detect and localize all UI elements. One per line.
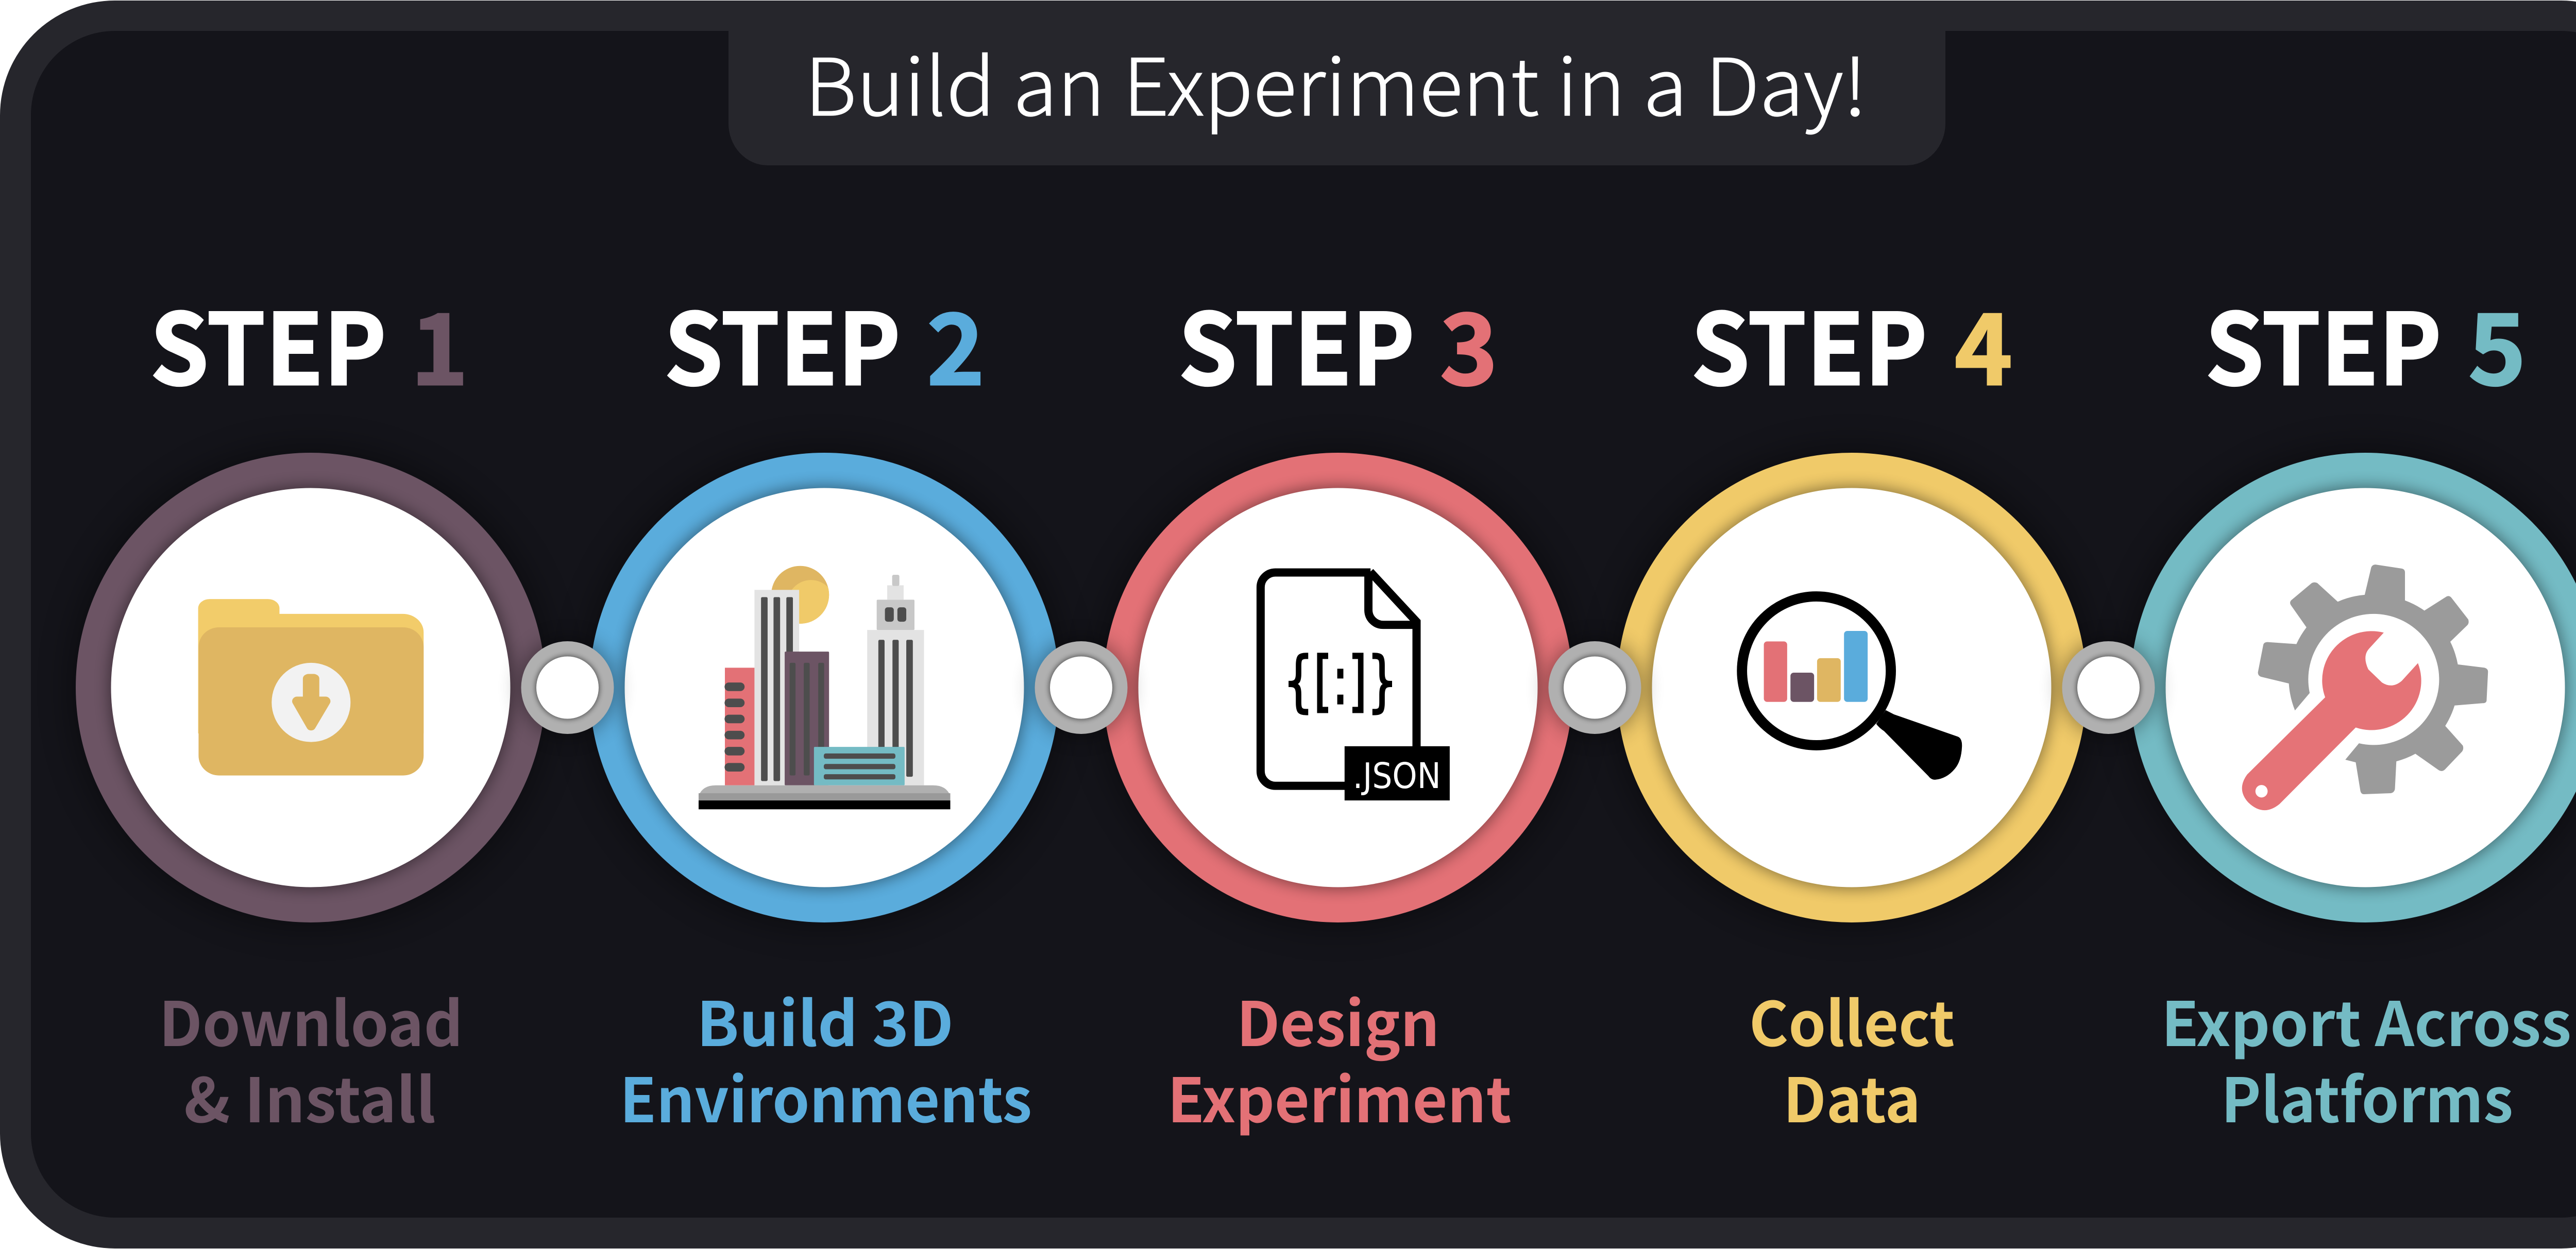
label: step 3 (1167, 976, 1512, 1140)
label: step 5: Platforms (2221, 1052, 2513, 1140)
connector 2-3 (1035, 641, 1127, 734)
label: step 5 (2161, 976, 2571, 1140)
purple building (785, 652, 829, 785)
icon: JSON file: {[:]} (1283, 643, 1398, 720)
ground base (699, 785, 951, 809)
icon: download folder (198, 599, 423, 776)
label: step 1: Download (159, 976, 463, 1064)
circle: step 4 (1609, 446, 2094, 930)
connector 4-5 (2062, 641, 2155, 734)
gear (2258, 564, 2488, 794)
step 1 heading: STEP (150, 271, 386, 414)
label: step 3: Design (1236, 976, 1439, 1064)
step 5 heading: STEP (2205, 271, 2442, 414)
circle: step 2 (582, 446, 1066, 930)
step 3 heading: STEP (1178, 271, 1415, 414)
connector 3-4 (1549, 641, 1641, 734)
label: step 3: Experiment (1167, 1052, 1512, 1140)
label: step 2: Environments (620, 1052, 1032, 1140)
step 1 heading: 1 (411, 271, 468, 414)
sun (772, 566, 829, 624)
circle: step 5 (2123, 446, 2576, 930)
icon: JSON file (1261, 572, 1450, 800)
step 3 heading: 3 (1440, 271, 1498, 414)
circle: step 1 (69, 446, 553, 930)
step 4 heading: STEP (1691, 271, 1927, 414)
title: Build an Experiment in a Day! (805, 25, 1867, 139)
icon: magnifier with bars (1742, 596, 1962, 780)
red building (724, 668, 754, 785)
label: step 1: & Install (184, 1052, 436, 1140)
label: step 4: Data (1783, 1052, 1921, 1140)
label: step 2 (620, 976, 1032, 1140)
JSON badge (1345, 746, 1450, 800)
label: step 4: Collect (1749, 976, 1955, 1064)
teal building (814, 747, 905, 785)
label: step 2: Build 3D (697, 976, 954, 1064)
tall building (754, 590, 799, 785)
step 5 heading: 5 (2468, 271, 2526, 414)
spire tower (867, 575, 924, 785)
label: step 4 (1749, 976, 1955, 1140)
step 4 heading: 4 (1955, 271, 2012, 414)
label: step 5: Export Across (2161, 976, 2571, 1064)
circle: step 3 (1096, 446, 1580, 930)
title tab (728, 15, 1945, 165)
icon: gear and wrench (2242, 564, 2488, 810)
label: step 1 (159, 976, 463, 1140)
step 2 heading: STEP (664, 271, 901, 414)
connector 1-2 (521, 641, 614, 734)
icon: 3D city (699, 566, 951, 809)
wrench (2242, 631, 2421, 810)
JSON badge: .JSON (1353, 756, 1441, 797)
step 2 heading: 2 (927, 271, 985, 414)
